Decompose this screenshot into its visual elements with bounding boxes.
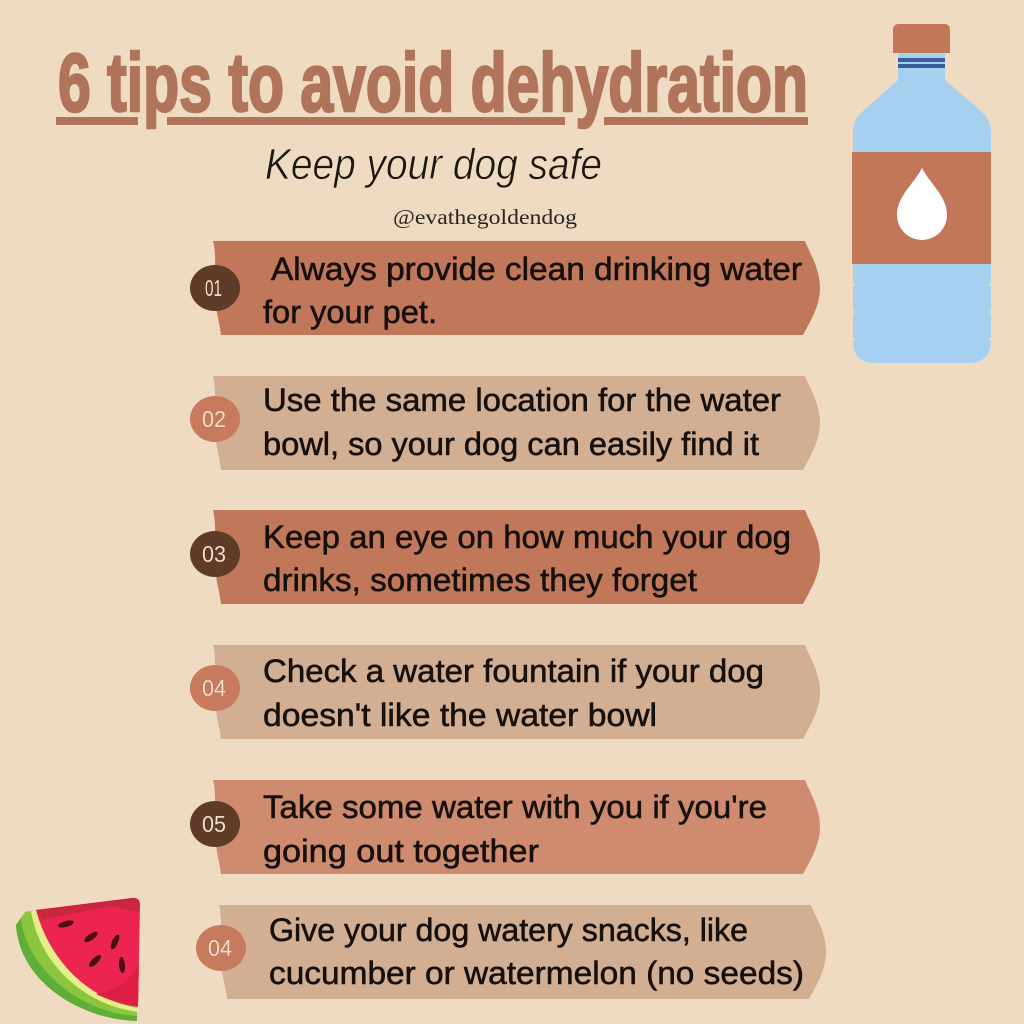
- icon: water bottle: [852, 24, 991, 363]
- tip 5: going out together: [263, 833, 539, 869]
- tip 3: 03: [202, 541, 226, 567]
- tip 2: bowl, so your dog can easily find it: [263, 426, 759, 462]
- tip 2: Use the same location for the water: [263, 382, 781, 418]
- tip 1: 01: [205, 275, 222, 301]
- tip 4: 04: [202, 675, 226, 701]
- tip 6: [196, 905, 826, 999]
- tip 1: for your pet.: [263, 294, 437, 330]
- icon: watermelon slice: [16, 898, 140, 1021]
- tip 3: Keep an eye on how much your dog: [263, 519, 791, 555]
- tip 6: cucumber or watermelon (no seeds): [269, 955, 804, 991]
- tip 6: Give your dog watery snacks, like: [269, 912, 748, 948]
- tip 1: [190, 241, 820, 335]
- handle: @evathegoldendog: [393, 205, 578, 229]
- tip 3: drinks, sometimes they forget: [263, 562, 697, 598]
- tip 4: [190, 645, 820, 739]
- tip 6: 04: [208, 935, 232, 961]
- subtitle: Keep your dog safe: [265, 140, 602, 189]
- tip 4: Check a water fountain if your dog: [263, 653, 764, 689]
- tip 2: 02: [202, 406, 226, 432]
- tip 4: doesn't like the water bowl: [263, 697, 657, 733]
- tip 1: Always provide clean drinking water: [271, 251, 802, 287]
- tip 5: 05: [202, 811, 226, 837]
- tip 5: [190, 780, 820, 874]
- tip 5: Take some water with you if you're: [263, 789, 767, 825]
- tip 3: [190, 510, 820, 604]
- tip 2: [190, 376, 820, 470]
